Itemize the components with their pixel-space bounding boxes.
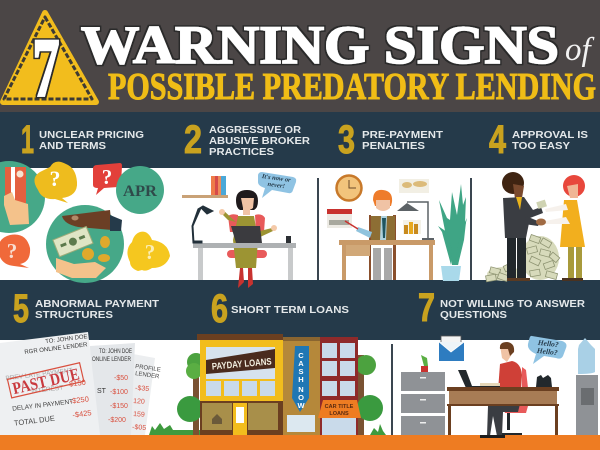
illustration: approval too easy [486,172,585,282]
document: middle: ONLINE LENDER [92,357,132,363]
document: middle: ST [97,388,107,395]
icon: filing cabinet [401,372,445,435]
illustration: aggressive broker [182,172,296,288]
document: back: -$05 [132,424,146,432]
desk lamp [192,206,213,243]
icon: hands exchanging money [46,205,124,283]
icon: orange question bubble [0,235,30,268]
panel: signs 5 to 7 heading band [0,280,600,340]
divider [317,178,319,280]
sign 3 heading: PENALTIES [362,140,425,152]
cash now building: W [297,401,305,410]
icon: yellow question cloud [127,232,170,271]
sign 4 heading: 4 [489,118,507,162]
sign 1 heading: UNCLEAR PRICING [39,129,144,141]
document: front: PREV LATE PAYMENT [5,367,73,382]
icon: hand with credit card [0,161,45,233]
speech bubble: Hello? [535,346,558,357]
document: back [125,354,161,435]
icon: small plant [421,355,428,372]
sign 6 heading [211,287,349,331]
sign 3 heading: 3 [338,118,355,162]
icon: calendar [327,209,352,228]
document: back: -$35 [135,385,149,393]
sign 7 heading: QUESTIONS [440,309,507,321]
woman at desk [219,190,277,288]
cash now building: C [298,351,304,360]
speech bubble: never! [267,181,286,190]
sign 7 heading: 7 [418,286,435,330]
car title loans building: LOANS [329,411,349,417]
sign 7 heading: NOT WILLING TO ANSWER [440,298,585,310]
icon: yellow question cloud: ? [50,166,60,191]
sign 4 heading: TOO EASY [512,140,570,152]
speech bubble: It's now or [260,173,291,184]
document: middle [90,343,135,435]
title: of: of [565,32,594,68]
icon: water cooler [576,338,598,435]
cash now building [283,337,320,435]
document: front: -$250 [69,394,89,406]
icon: red question bubble: ? [102,165,112,189]
document: middle: -$150 [110,403,128,410]
sign 2 heading [184,118,310,162]
document: middle: -$200 [108,417,126,424]
car title loans building [318,337,361,435]
icon: red question bubble [93,163,122,195]
orange footer [0,435,600,450]
icon: pile of money [486,234,560,282]
sign 2 heading: AGGRESSIVE OR [209,124,301,136]
document: middle: -$50 [114,375,128,382]
sign 1 heading: AND TERMS [39,140,106,152]
desk [339,240,435,280]
sign 5 heading: STRUCTURES [35,309,113,321]
cash now building: S [298,367,304,376]
desk [193,236,296,280]
illustration: abnormal payment documents [0,332,161,435]
sign 3 heading: PRE-PAYMENT [362,129,444,141]
icon: yellow question cloud: ? [145,240,155,264]
illustration: payday loan storefronts [149,334,386,435]
sign 2 heading: ABUSIVE BROKER [209,135,310,147]
grass and trees [149,353,386,435]
payday loans building [197,334,283,435]
car title loans building: CAR TITLE [325,404,354,410]
sign 2 heading: 2 [184,118,202,162]
stamp: past due: PAST DUE [11,364,81,398]
sign 7 heading [418,286,585,330]
illustration: pre-payment penalties [327,176,467,281]
sign 1 heading: 1 [21,118,34,162]
sign 6 heading: 6 [211,287,228,331]
sign 4 heading: APPROVAL IS [512,129,588,141]
icon: wall clock [336,176,362,200]
man at desk [345,190,396,280]
cash now building: A [298,359,304,368]
title: warning signs: WARNING SIGNS [81,15,559,75]
icon: APR circle: APR [123,183,157,200]
document: front: TOTAL DUE [13,414,55,428]
icon: world map [399,179,429,193]
document: back: PROFILE [135,364,161,374]
icon: potted plant [438,184,467,281]
document: back: 159 [133,411,145,419]
icon: yellow question cloud [34,162,77,203]
sign 3 heading [338,118,444,162]
speech bubble [528,336,566,364]
header panel [0,0,600,115]
icon: email envelope [439,336,464,361]
document: back: LENDER [135,371,160,380]
sign 6 heading: SHORT TERM LOANS [231,304,349,316]
panel: signs 1 to 4 heading band [0,112,600,168]
sign 4 heading [489,118,588,162]
speech bubble: Hello? [536,338,559,349]
icon: APR circle [116,166,164,214]
cash now building: N [298,385,304,394]
document: front: INTEREST [31,384,64,395]
icon: warning triangle [3,13,96,115]
document: back: 120 [133,398,145,406]
sign 2 heading: PRACTICES [209,146,274,158]
sign 5 heading: ABNORMAL PAYMENT [35,298,160,310]
icon: bookshelf [182,176,228,198]
document: front: TO: JOHN DOE [45,334,88,345]
document: front: RGR ONLINE LENDER [24,342,88,356]
woman in yellow dress [536,175,585,281]
illustration: unclear pricing [0,161,170,283]
document: front: DELAY IN PAYMENT [12,398,74,413]
man on phone at desk [480,342,528,438]
sign 1 heading [21,118,144,162]
speech bubble [258,172,296,198]
desk lamp and chart [397,202,434,240]
icon: warning triangle: 7 [32,22,60,115]
document: front [0,332,100,435]
payday loans building: PAYDAY LOANS [211,356,272,373]
document: middle: TO: JOHN DOE [99,349,132,355]
document: front: -$425 [72,408,92,419]
divider [470,178,472,280]
cash now building: O [298,393,304,402]
sign 5 heading [13,287,160,331]
desk and laptop [447,370,559,435]
document: middle: -$100 [110,389,128,396]
cash now building: H [298,375,304,384]
man in suit [502,172,543,281]
sign 5 heading: 5 [13,287,29,331]
document: front: -$150 [66,378,86,389]
illustration: office not answering [401,336,598,438]
icon: orange question bubble: ? [7,239,17,263]
divider [391,344,393,435]
